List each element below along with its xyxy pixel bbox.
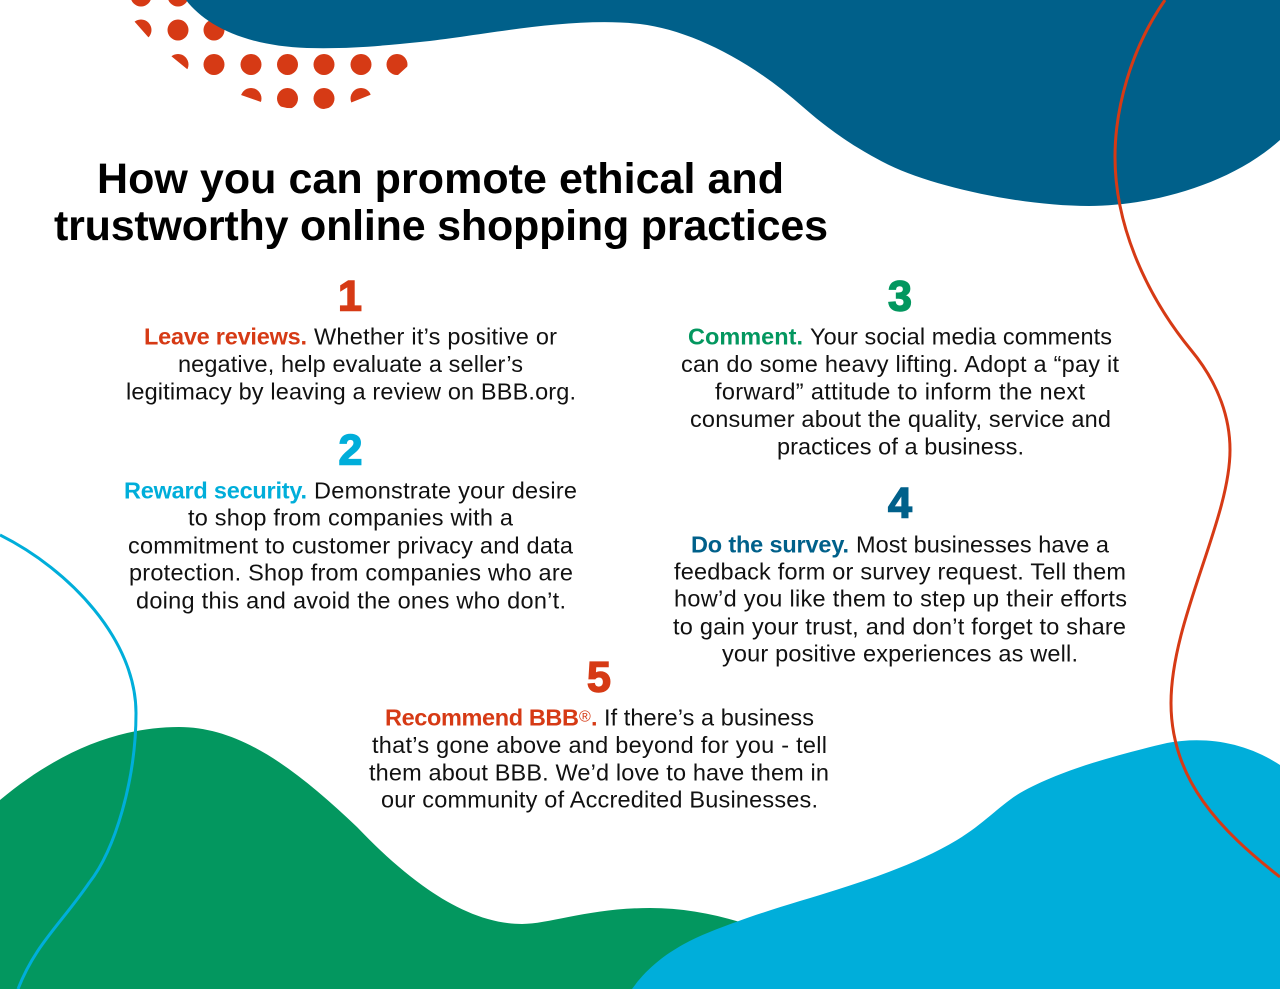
title: How you can promote ethical and	[97, 155, 784, 203]
step 5 text: ®	[579, 708, 591, 726]
title	[54, 155, 828, 250]
step 2 text: protection. Shop from companies who are	[129, 560, 573, 586]
step 3: comment	[681, 272, 1119, 460]
step 4 text: Do the survey.	[691, 532, 849, 558]
step 5: recommend BBB	[369, 654, 829, 812]
step 4 text	[673, 532, 1127, 666]
number 1: 1	[338, 272, 362, 320]
navy blob top right	[186, 0, 1280, 206]
cyan blob bottom right	[632, 740, 1280, 989]
step 5 text: that’s gone above and beyond for you - tell	[372, 732, 827, 758]
decorative dot pattern	[130, 0, 408, 109]
step 4 text: to gain your trust, and don’t forget to share	[673, 614, 1126, 640]
step 1 text: Leave reviews.	[144, 324, 307, 350]
step 2: reward security	[124, 426, 577, 614]
step 2 text: doing this and avoid the ones who don’t.	[136, 588, 566, 614]
step 3 text: Your social media comments	[810, 324, 1112, 350]
step 5 text: .	[591, 704, 598, 730]
step 4: do the survey	[673, 480, 1127, 666]
number 3: 3	[888, 272, 912, 320]
number 4: 4	[888, 480, 912, 528]
cyan wavy line	[0, 535, 136, 989]
step 4 text: how’d you like them to step up their efforts	[674, 586, 1127, 612]
step 4 text: feedback form or survey request. Tell them	[674, 558, 1126, 584]
step 2 text: Demonstrate your desire	[314, 478, 577, 504]
step 2 text: Reward security.	[124, 478, 307, 504]
step 2 text: to shop from companies with a	[188, 504, 514, 530]
red wavy line	[1115, 0, 1280, 877]
step 5 text: our community of Accredited Businesses.	[381, 786, 818, 812]
step 1 text: legitimacy by leaving a review on BBB.org.	[126, 378, 576, 404]
green blob bottom left	[0, 727, 740, 989]
step 1 text: negative, help evaluate a seller’s	[178, 351, 523, 377]
title: trustworthy online shopping practices	[54, 202, 828, 250]
step 5 text: If there’s a business	[604, 704, 814, 730]
step 5 text: them about BBB. We’d love to have them in	[369, 760, 829, 786]
number 5: 5	[587, 654, 611, 702]
step 5 text	[369, 704, 829, 812]
number 2: 2	[339, 426, 362, 474]
step 3 text: consumer about the quality, service and	[690, 406, 1111, 432]
step 3 text	[681, 324, 1119, 460]
step 4 text: Most businesses have a	[856, 532, 1110, 558]
step 3 text: practices of a business.	[777, 434, 1024, 460]
step 5 text: Recommend BBB	[385, 704, 579, 730]
step 4 text: your positive experiences as well.	[722, 640, 1078, 666]
step 1 text	[126, 324, 576, 404]
step 1 text: Whether it’s positive or	[314, 324, 557, 350]
step 2 text	[124, 478, 577, 614]
step 1: leave reviews	[126, 272, 576, 404]
step 2 text: commitment to customer privacy and data	[128, 532, 574, 558]
step 3 text: can do some heavy lifting. Adopt a “pay it	[681, 351, 1119, 377]
step 3 text: Comment.	[688, 324, 803, 350]
step 3 text: forward” attitude to inform the next	[715, 378, 1085, 404]
